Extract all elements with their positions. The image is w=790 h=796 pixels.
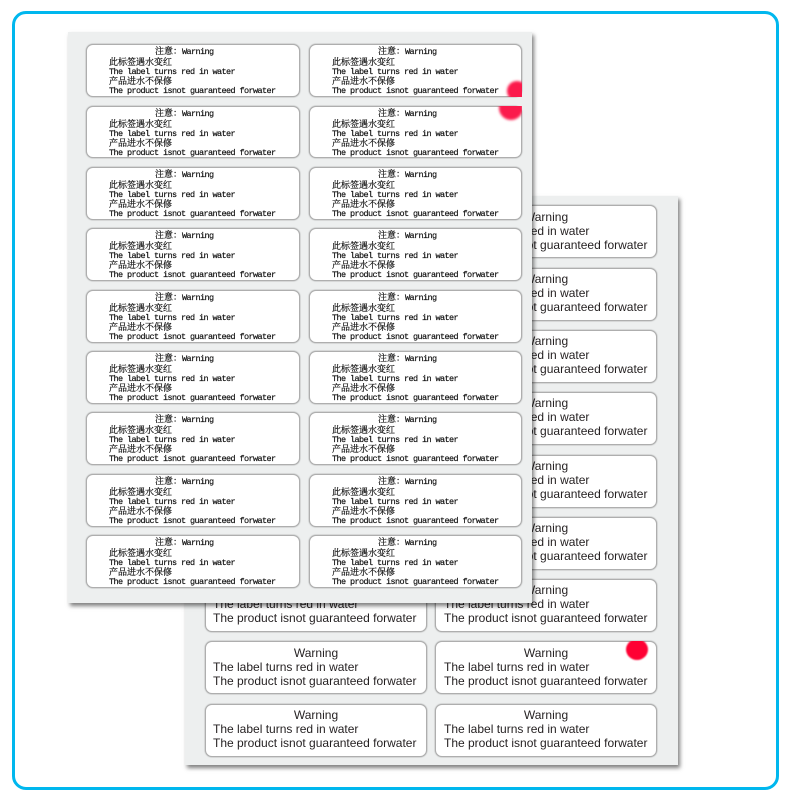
front label row 9 right: The product isnot guaranteed forwater: [332, 577, 499, 587]
front label row 5 left: The label turns red in water: [109, 313, 235, 323]
back label row 8 right with red water mark: Warning: [524, 646, 568, 660]
front label row 5 right: 产品进水不保修: [332, 320, 395, 333]
front label row 9 right: The label turns red in water: [332, 558, 458, 568]
back label row 4 left: The product isnot guaranteed forwater: [213, 424, 416, 438]
back label row 3 left: [205, 330, 427, 383]
back label row 7 right: The product isnot guaranteed forwater: [444, 611, 647, 625]
front label row 3 left: The product isnot guaranteed forwater: [109, 209, 276, 219]
front label row 4 left: 产品进水不保修: [109, 258, 172, 271]
front label row 7 right: The label turns red in water: [332, 435, 458, 445]
back label row 4 right: The product isnot guaranteed forwater: [444, 424, 647, 438]
front label row 4 left: The label turns red in water: [109, 251, 235, 261]
back label row 6 left: The label turns red in water: [213, 535, 358, 549]
front label row 1 right with red water mark: [309, 44, 522, 97]
front label row 2 right with red water mark: The product isnot guaranteed forwater: [332, 148, 499, 158]
front label row 7 left: 此标签遇水变红: [109, 423, 172, 436]
back label row 2 right: The product isnot guaranteed forwater: [444, 300, 647, 314]
back label row 7 right: [435, 579, 657, 632]
front label row 3 left: [86, 167, 300, 220]
front label row 5 right: 注意：Warning: [378, 290, 437, 303]
front label row 9 right: [309, 535, 522, 588]
front label row 8 right: 此标签遇水变红: [332, 485, 395, 498]
front label row 6 right: The label turns red in water: [332, 374, 458, 384]
back label row 9 right: Warning: [524, 708, 568, 722]
front label row 4 left: 注意：Warning: [155, 228, 214, 241]
back label row 8 right with red water mark: [435, 641, 657, 694]
back label row 7 right: Warning: [524, 583, 568, 597]
back label row 8 right with red water mark: The product isnot guaranteed forwater: [444, 674, 647, 688]
front label row 9 left: The product isnot guaranteed forwater: [109, 577, 276, 587]
back label row 5 left: The product isnot guaranteed forwater: [213, 487, 416, 501]
back label row 3 left: The label turns red in water: [213, 348, 358, 362]
front label row 1 left: 此标签遇水变红: [109, 55, 172, 68]
panel: back label sheet (English): [185, 196, 678, 765]
front label row 6 right: 注意：Warning: [378, 351, 437, 364]
front label row 5 right: The label turns red in water: [332, 313, 458, 323]
front label row 2 left: 注意：Warning: [155, 106, 214, 119]
front label row 7 left: The label turns red in water: [109, 435, 235, 445]
back label row 3 right: The label turns red in water: [444, 348, 589, 362]
back label row 6 right: [435, 517, 657, 570]
front label row 5 left: [86, 290, 300, 343]
front label row 6 right: The product isnot guaranteed forwater: [332, 393, 499, 403]
front label row 5 left: 注意：Warning: [155, 290, 214, 303]
back label row 5 right: The product isnot guaranteed forwater: [444, 487, 647, 501]
front label row 3 left: 产品进水不保修: [109, 197, 172, 210]
front label row 6 left: The product isnot guaranteed forwater: [109, 393, 276, 403]
back label row 6 left: The product isnot guaranteed forwater: [213, 549, 416, 563]
front label row 9 left: [86, 535, 300, 588]
back label row 9 left: The product isnot guaranteed forwater: [213, 736, 416, 750]
front label row 1 left: 注意：Warning: [155, 44, 214, 57]
back label row 6 left: [205, 517, 427, 570]
front label row 3 right: 此标签遇水变红: [332, 178, 395, 191]
front label row 6 left: 此标签遇水变红: [109, 362, 172, 375]
back label row 2 left: The product isnot guaranteed forwater: [213, 300, 416, 314]
front label row 3 right: 产品进水不保修: [332, 197, 395, 210]
back label row 4 left: [205, 392, 427, 445]
front label row 8 right: The label turns red in water: [332, 497, 458, 507]
front label row 7 left: [86, 412, 300, 465]
front label row 8 left: 注意：Warning: [155, 474, 214, 487]
front label row 6 left: 注意：Warning: [155, 351, 214, 364]
back label row 9 right: The label turns red in water: [444, 722, 589, 736]
front label row 8 left: 产品进水不保修: [109, 504, 172, 517]
front label row 2 left: 此标签遇水变红: [109, 117, 172, 130]
back label row 6 right: The product isnot guaranteed forwater: [444, 549, 647, 563]
front label row 2 left: The label turns red in water: [109, 129, 235, 139]
front label row 6 left: 产品进水不保修: [109, 381, 172, 394]
front label row 8 left: [86, 474, 300, 527]
back label row 7 left: The label turns red in water: [213, 597, 358, 611]
back label row 8 left: Warning: [294, 646, 338, 660]
back label row 2 left: Warning: [294, 272, 338, 286]
back label row 9 left: [205, 704, 427, 757]
back label row 9 right: The product isnot guaranteed forwater: [444, 736, 647, 750]
front label row 1 left: The label turns red in water: [109, 67, 235, 77]
front label row 9 right: 注意：Warning: [378, 535, 437, 548]
back label row 7 left: [205, 579, 427, 632]
front label row 8 right: 注意：Warning: [378, 474, 437, 487]
front label row 6 right: 产品进水不保修: [332, 381, 395, 394]
back label row 3 left: The product isnot guaranteed forwater: [213, 362, 416, 376]
front label row 2 left: [86, 106, 300, 158]
front label row 7 right: 注意：Warning: [378, 412, 437, 425]
back label row 8 right with red water mark: The label turns red in water: [444, 660, 589, 674]
back label row 4 right: The label turns red in water: [444, 410, 589, 424]
front label row 4 right: The product isnot guaranteed forwater: [332, 270, 499, 280]
front label row 7 left: 产品进水不保修: [109, 442, 172, 455]
front label row 7 left: 注意：Warning: [155, 412, 214, 425]
front label row 3 right: The label turns red in water: [332, 190, 458, 200]
back label row 7 right: The label turns red in water: [444, 597, 589, 611]
back label row 5 left: Warning: [294, 459, 338, 473]
front label row 2 right with red water mark: 产品进水不保修: [332, 136, 395, 149]
back label row 9 left: The label turns red in water: [213, 722, 358, 736]
back label row 4 right: [435, 392, 657, 445]
front label row 9 left: The label turns red in water: [109, 558, 235, 568]
front label row 2 right with red water mark: [309, 106, 522, 158]
front label row 5 right: [309, 290, 522, 343]
front label row 1 left: 产品进水不保修: [109, 74, 172, 87]
front label row 5 left: 此标签遇水变红: [109, 301, 172, 314]
front label row 2 left: 产品进水不保修: [109, 136, 172, 149]
back label row 4 left: Warning: [294, 396, 338, 410]
front label row 1 left: [86, 44, 300, 97]
front label row 4 right: 注意：Warning: [378, 228, 437, 241]
front label row 8 right: The product isnot guaranteed forwater: [332, 516, 499, 526]
back label row 4 right: Warning: [524, 396, 568, 410]
front label row 1 left: The product isnot guaranteed forwater: [109, 86, 276, 96]
front label row 3 left: 此标签遇水变红: [109, 178, 172, 191]
front label row 6 right: [309, 351, 522, 404]
front label row 1 right with red water mark: 注意：Warning: [378, 44, 437, 57]
back label row 2 left: The label turns red in water: [213, 286, 358, 300]
front label row 3 right: 注意：Warning: [378, 167, 437, 180]
back label row 2 right: The label turns red in water: [444, 286, 589, 300]
front label row 6 left: [86, 351, 300, 404]
back label row 2 right: [435, 268, 657, 321]
back label row 3 right: [435, 330, 657, 383]
front label row 4 right: 此标签遇水变红: [332, 239, 395, 252]
back label row 5 right: The label turns red in water: [444, 473, 589, 487]
front label row 5 left: The product isnot guaranteed forwater: [109, 332, 276, 342]
front label row 4 left: The product isnot guaranteed forwater: [109, 270, 276, 280]
back label row 6 right: The label turns red in water: [444, 535, 589, 549]
front label row 4 left: [86, 228, 300, 281]
back label row 6 left: Warning: [294, 521, 338, 535]
back label row 2 right: Warning: [524, 272, 568, 286]
front label row 4 left: 此标签遇水变红: [109, 239, 172, 252]
front label row 8 left: The label turns red in water: [109, 497, 235, 507]
front label row 2 right with red water mark: 注意：Warning: [378, 106, 437, 119]
front label row 7 left: The product isnot guaranteed forwater: [109, 454, 276, 464]
front label row 1 right with red water mark: 产品进水不保修: [332, 74, 395, 87]
back label row 4 left: The label turns red in water: [213, 410, 358, 424]
front label row 6 right: 此标签遇水变红: [332, 362, 395, 375]
back label row 9 right: [435, 704, 657, 757]
front label row 3 right: [309, 167, 522, 220]
back label row 1 right: Warning: [524, 210, 568, 224]
front label row 4 right: [309, 228, 522, 281]
back label row 1 left: The label turns red in water: [213, 224, 358, 238]
back label row 5 right: Warning: [524, 459, 568, 473]
back label row 1 right: The product isnot guaranteed forwater: [444, 238, 647, 252]
back label row 1 right: [435, 205, 657, 258]
back label row 5 right: [435, 455, 657, 508]
front label row 8 left: The product isnot guaranteed forwater: [109, 516, 276, 526]
front label row 8 right: [309, 474, 522, 527]
front label row 3 left: 注意：Warning: [155, 167, 214, 180]
back label row 1 left: The product isnot guaranteed forwater: [213, 238, 416, 252]
back label row 7 left: Warning: [294, 583, 338, 597]
front label row 9 right: 产品进水不保修: [332, 565, 395, 578]
front label row 4 right: 产品进水不保修: [332, 258, 395, 271]
back label row 1 right: The label turns red in water: [444, 224, 589, 238]
front label row 9 left: 注意：Warning: [155, 535, 214, 548]
back label row 3 right: Warning: [524, 334, 568, 348]
panel: front label sheet (Chinese and English): [68, 32, 532, 603]
front label row 6 left: The label turns red in water: [109, 374, 235, 384]
front label row 7 right: [309, 412, 522, 465]
back label row 2 left: [205, 268, 427, 321]
front label row 1 right with red water mark: 此标签遇水变红: [332, 55, 395, 68]
front label row 2 right with red water mark: The label turns red in water: [332, 129, 458, 139]
front label row 5 right: 此标签遇水变红: [332, 301, 395, 314]
front label row 7 right: 此标签遇水变红: [332, 423, 395, 436]
back label row 1 left: Warning: [294, 210, 338, 224]
back label row 3 left: Warning: [294, 334, 338, 348]
back label row 8 left: The product isnot guaranteed forwater: [213, 674, 416, 688]
front label row 3 left: The label turns red in water: [109, 190, 235, 200]
back label row 3 right: The product isnot guaranteed forwater: [444, 362, 647, 376]
back label row 5 left: [205, 455, 427, 508]
front label row 8 right: 产品进水不保修: [332, 504, 395, 517]
back label row 8 left: [205, 641, 427, 694]
front label row 9 right: 此标签遇水变红: [332, 546, 395, 559]
front label row 2 right with red water mark: 此标签遇水变红: [332, 117, 395, 130]
front label row 5 left: 产品进水不保修: [109, 320, 172, 333]
back label row 7 left: The product isnot guaranteed forwater: [213, 611, 416, 625]
front label row 2 left: The product isnot guaranteed forwater: [109, 148, 276, 158]
back label row 8 left: The label turns red in water: [213, 660, 358, 674]
front label row 1 right with red water mark: The product isnot guaranteed forwater: [332, 86, 499, 96]
front label row 5 right: The product isnot guaranteed forwater: [332, 332, 499, 342]
front label row 4 right: The label turns red in water: [332, 251, 458, 261]
front label row 3 right: The product isnot guaranteed forwater: [332, 209, 499, 219]
front label row 8 left: 此标签遇水变红: [109, 485, 172, 498]
back label row 9 left: Warning: [294, 708, 338, 722]
front label row 9 left: 产品进水不保修: [109, 565, 172, 578]
front label row 7 right: 产品进水不保修: [332, 442, 395, 455]
back label row 6 right: Warning: [524, 521, 568, 535]
front label row 1 right with red water mark: The label turns red in water: [332, 67, 458, 77]
back label row 5 left: The label turns red in water: [213, 473, 358, 487]
front label row 9 left: 此标签遇水变红: [109, 546, 172, 559]
front label row 7 right: The product isnot guaranteed forwater: [332, 454, 499, 464]
back label row 1 left: [205, 205, 427, 258]
